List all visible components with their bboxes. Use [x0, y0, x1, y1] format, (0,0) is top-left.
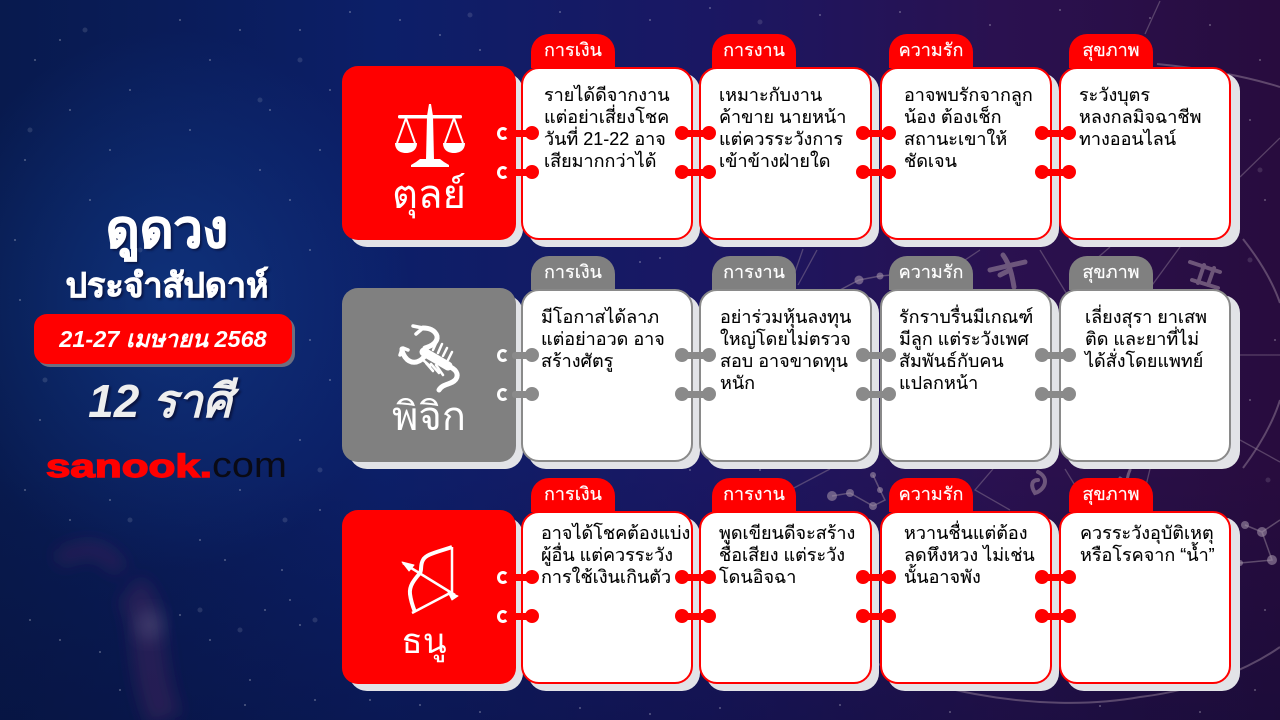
- card: สุขภาพ: ได้สั่งโดยแพทย์: [1085, 351, 1203, 371]
- card: สุขภาพ: [1059, 289, 1231, 462]
- tab: การงาน: [712, 256, 796, 290]
- card: การเงิน: การใช้เงินเกินตัว: [541, 567, 671, 587]
- card: การเงิน: มีโอกาสได้ลาภ: [541, 307, 659, 327]
- card: การเงิน: รายได้ดีจากงาน: [544, 85, 670, 105]
- row: ธนู (Sagittarius): [342, 478, 1240, 691]
- card: การเงิน: [521, 67, 693, 240]
- tab: ความรัก: [889, 256, 973, 290]
- tab: ความรัก: ความรัก: [899, 484, 963, 504]
- row: ตุลย์ (Libra): [342, 34, 1240, 247]
- card: การงาน: [699, 67, 872, 240]
- card: การเงิน: [521, 511, 693, 684]
- card: การงาน: [699, 289, 872, 462]
- card: สุขภาพ: หรือโรคจาก “น้ำ”: [1080, 545, 1215, 565]
- panel: sign พิจิก: [342, 288, 516, 462]
- tab: ความรัก: [889, 34, 973, 68]
- heading: ดูดวง: ดูดวง: [106, 201, 228, 259]
- tab: การเงิน: [531, 478, 615, 512]
- sign name: ตุลย์: [392, 173, 466, 217]
- heading: ประจำสัปดาห์: ประจำสัปดาห์: [65, 267, 269, 305]
- card: การงาน: โดนอิจฉา: [719, 567, 796, 587]
- tab: การเงิน: [531, 34, 615, 68]
- tab: การเงิน: [531, 256, 615, 290]
- card: สุขภาพ: [1059, 511, 1231, 684]
- tab: สุขภาพ: สุขภาพ: [1082, 40, 1140, 60]
- tab: สุขภาพ: [1069, 478, 1153, 512]
- card: ความรัก: [880, 289, 1052, 462]
- tab: การงาน: การงาน: [723, 40, 785, 60]
- icon: scales: [395, 104, 465, 167]
- card: การงาน: ค้าขาย นายหน้า: [719, 107, 846, 127]
- tab: สุขภาพ: สุขภาพ: [1082, 262, 1140, 282]
- row: พิจิก (Scorpio): [342, 256, 1240, 469]
- card: สุขภาพ: หลงกลมิจฉาชีพ: [1079, 107, 1201, 127]
- binder rings: [497, 348, 1076, 401]
- tab: การเงิน: การเงิน: [544, 484, 602, 504]
- card: สุขภาพ: เลี่ยงสุรา ยาเสพ: [1085, 307, 1207, 327]
- card: การเงิน: ผู้อื่น แต่ควรระวัง: [541, 545, 673, 565]
- panel: sign ธนู: [342, 510, 516, 684]
- constellations: [832, 275, 1280, 563]
- panel: left title block: [34, 201, 295, 484]
- tab: การงาน: [712, 34, 796, 68]
- sign name: พิจิก: [392, 395, 466, 439]
- logo: sanook.com: [46, 448, 287, 484]
- tab: สุขภาพ: [1069, 34, 1153, 68]
- heading: 12 ราศี: 12 ราศี: [88, 375, 232, 427]
- tab: สุขภาพ: สุขภาพ: [1082, 484, 1140, 504]
- sign name: ธนู: [401, 622, 447, 661]
- card: การงาน: ชื่อเสียง แต่ระวัง: [719, 545, 845, 565]
- card: สุขภาพ: [1059, 67, 1231, 240]
- card: การเงิน: วันที่ 21-22 อาจ: [544, 129, 666, 149]
- tab: การงาน: [712, 478, 796, 512]
- tab: การงาน: การงาน: [723, 484, 785, 504]
- icon: scorpion: [398, 324, 460, 392]
- card: การงาน: เข้าข้างฝ่ายใด: [719, 151, 830, 171]
- card: ความรัก: สัมพันธ์กับคน: [899, 351, 1004, 371]
- card: สุขภาพ: ระวังบุตร: [1079, 85, 1150, 105]
- card: ความรัก: ลดหึงหวง ไม่เช่น: [904, 545, 1035, 565]
- card: สุขภาพ: ทางออนไลน์: [1079, 129, 1176, 149]
- tab: สุขภาพ: [1069, 256, 1153, 290]
- card: ความรัก: แปลกหน้า: [899, 373, 978, 393]
- card: การงาน: สอบ อาจขาดทุน: [720, 351, 848, 371]
- card: การงาน: หนัก: [720, 373, 755, 393]
- tab: การเงิน: การเงิน: [544, 262, 602, 282]
- tab: ความรัก: ความรัก: [899, 262, 963, 282]
- card: ความรัก: รักราบรื่นมีเกณฑ์: [899, 307, 1033, 327]
- tab: ความรัก: [889, 478, 973, 512]
- panel: sign ตุลย์: [342, 66, 516, 240]
- card: ความรัก: ชัดเจน: [904, 151, 957, 171]
- card: การเงิน: [521, 289, 693, 462]
- card: สุขภาพ: ติด และยาที่ไม่: [1085, 329, 1199, 349]
- card: การงาน: เหมาะกับงาน: [719, 85, 822, 105]
- date badge: [34, 314, 292, 364]
- tab: การเงิน: การเงิน: [544, 40, 602, 60]
- card: การงาน: อย่าร่วมหุ้นลงทุน: [720, 307, 851, 327]
- card: การงาน: [699, 511, 872, 684]
- card: การเงิน: เสียมากกว่าได้: [544, 151, 656, 171]
- card: ความรัก: หวานชื่นแต่ต้อง: [904, 523, 1028, 543]
- zodiac glyphs in the background: [990, 255, 1220, 493]
- card: การเงิน: แต่อย่าเสี่ยงโชค: [544, 107, 669, 127]
- tab: ความรัก: ความรัก: [899, 40, 963, 60]
- logo: sanook.com: sanook.: [46, 448, 212, 484]
- card: สุขภาพ: ควรระวังอุบัติเหตุ: [1080, 523, 1214, 543]
- card: การเงิน: แต่อย่าอวด อาจ: [541, 329, 665, 349]
- card: ความรัก: มีลูก แต่ระวังเพศ: [899, 329, 1029, 349]
- date badge: 21-27 เมษายน 2568: [59, 326, 267, 352]
- card: ความรัก: น้อง ต้องเช็ก: [904, 107, 1001, 127]
- card: การงาน: พูดเขียนดีจะสร้าง: [719, 523, 855, 543]
- card: การงาน: แต่ควรระวังการ: [719, 129, 843, 149]
- tab: การงาน: การงาน: [723, 262, 785, 282]
- card: การเงิน: สร้างศัตรู: [541, 351, 613, 371]
- binder rings: [497, 126, 1076, 179]
- card: ความรัก: อาจพบรักจากลูก: [904, 85, 1033, 105]
- card: ความรัก: [880, 511, 1052, 684]
- card: ความรัก: นั้นอาจพัง: [904, 567, 981, 587]
- binder rings: [497, 570, 1076, 623]
- card: ความรัก: สถานะเขาให้: [904, 129, 1007, 149]
- card: การเงิน: อาจได้โชคต้องแบ่ง: [541, 523, 690, 543]
- card: ความรัก: [880, 67, 1052, 240]
- card: การงาน: ใหญ่โดยไม่ตรวจ: [720, 329, 851, 349]
- icon: bow and arrow: [402, 545, 458, 614]
